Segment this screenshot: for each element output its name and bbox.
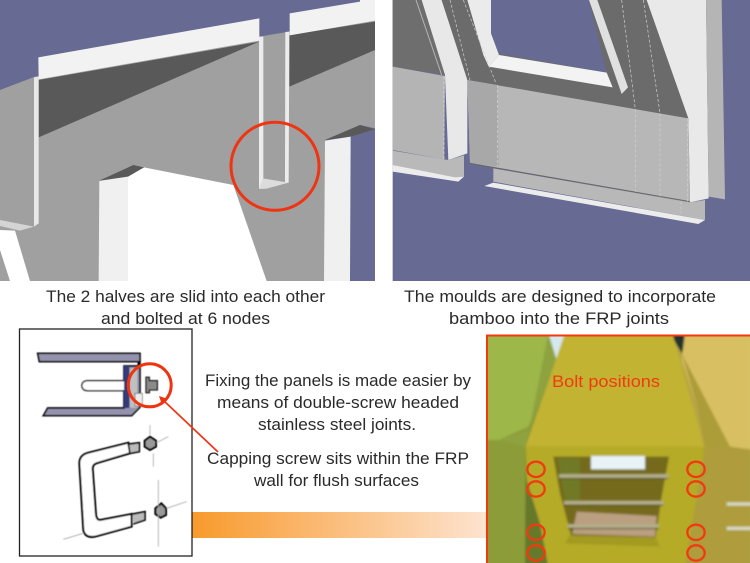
callout: red circle on the sliding joint <box>231 122 319 210</box>
panel: 3D model of the mould <box>393 0 750 281</box>
panel: hand sketch of the double-screw joint <box>20 329 192 556</box>
caption: moulds: The moulds are designed to incorporate <box>404 287 716 306</box>
sketch: U-shaped double-screw bolt <box>63 425 187 547</box>
label: bolt positions: Bolt positions <box>552 372 660 391</box>
text block: fixing the panels: means of double-screw headed <box>217 393 459 412</box>
arrow: points from the text to the capping screw <box>159 396 218 452</box>
panel: photo of the assembled modules with bolt positions <box>485 333 750 563</box>
text block: capping screw: wall for flush surfaces <box>253 471 419 490</box>
caption: two halves <box>46 287 325 328</box>
text block: capping screw <box>207 449 469 490</box>
photo: modules <box>485 333 750 563</box>
caption: two halves: and bolted at 6 nodes <box>101 309 270 328</box>
photo frame <box>487 336 750 563</box>
text block: fixing the panels: stainless steel joints. <box>258 415 416 434</box>
left mould fragment <box>393 0 467 182</box>
main mould frame <box>442 0 725 224</box>
text block: fixing the panels <box>205 371 471 434</box>
caption: moulds <box>404 287 716 328</box>
text block: capping screw: Capping screw sits within the FRP <box>207 449 469 468</box>
decorative orange gradient bar <box>192 512 487 538</box>
callout: red circle around capping screw <box>128 364 171 407</box>
sketch: joint cross-section <box>38 353 157 416</box>
caption: two halves: The 2 halves are slid into each other <box>46 287 325 306</box>
text block: fixing the panels: Fixing the panels is made easier by <box>205 371 471 390</box>
caption: moulds: bamboo into the FRP joints <box>449 309 669 328</box>
panel: 3D model of two halves slid together <box>0 0 375 285</box>
bolt position markers <box>527 462 705 561</box>
